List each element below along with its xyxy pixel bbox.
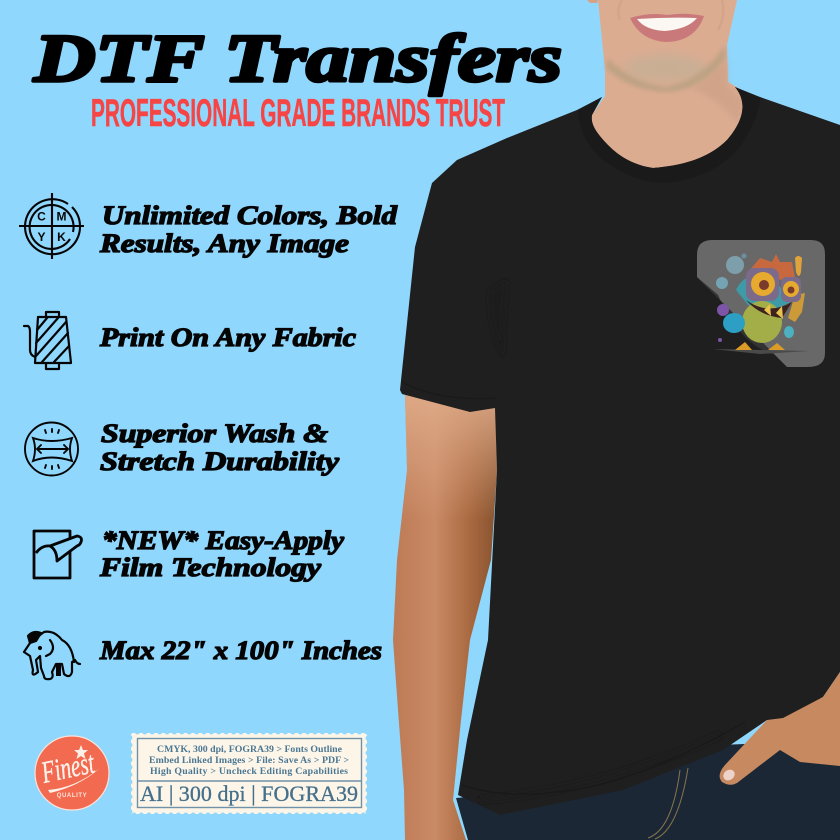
star: [74, 745, 88, 759]
eyes: [751, 272, 775, 296]
icon: thread spool: [24, 312, 71, 369]
monster artwork: [713, 254, 810, 354]
swash: [48, 768, 100, 793]
script word: Finest: [38, 744, 98, 790]
divider: [137, 780, 362, 782]
stamp paper: [131, 733, 367, 814]
text: wash and stretch durability: Stretch Durability: [100, 447, 340, 476]
quality label: QUALITY: [57, 793, 87, 799]
jaw shadow: [606, 45, 726, 92]
inner frame: [138, 738, 362, 808]
teeth: [637, 18, 697, 31]
stamp: file specification: [130, 732, 368, 815]
badge: finest quality: [35, 736, 109, 810]
text: wash and stretch durability: [100, 419, 340, 476]
lips: [630, 14, 704, 42]
icon: CMYK registration target: C: [37, 210, 46, 224]
feet: [735, 342, 785, 350]
icon: stretch durability: [25, 422, 78, 476]
text: print on any fabric: Print On Any Fabric: [99, 323, 357, 352]
teal arm: [723, 313, 745, 333]
jeans stitching: [648, 768, 688, 839]
mouth and teeth: [746, 300, 792, 318]
teal head: [736, 276, 795, 312]
orange hair: [748, 254, 795, 282]
arm: [393, 395, 497, 840]
icon: CMYK registration target: Y: [37, 230, 46, 244]
mouth: [630, 14, 704, 42]
sleeve hem: [402, 382, 496, 399]
icon: elephant: [24, 632, 80, 679]
scalloped edge: [130, 732, 368, 815]
text: unlimited colors: [99, 201, 398, 258]
t-shirt: [400, 87, 840, 815]
text: wash and stretch durability: Superior Wash &: [101, 419, 328, 448]
transparent film: [697, 240, 825, 367]
text: easy-apply film: Film Technology: [99, 553, 322, 582]
text: easy-apply film: [99, 526, 345, 582]
fingernail: [721, 767, 737, 783]
ear: [587, 0, 598, 3]
right arm: [784, 326, 794, 338]
neck shadow: [693, 60, 745, 125]
shirt folds: [480, 735, 720, 800]
shadow streak: [713, 349, 810, 354]
instructions: CMYK, 300 dpi, FOGRA39 > Fonts Outline: [157, 744, 343, 755]
peeled corner: [697, 277, 787, 367]
icon: CMYK registration target: K: [57, 230, 66, 244]
collar band: [578, 87, 760, 183]
icon: CMYK registration target: [19, 193, 84, 259]
upper arm highlight: [402, 395, 497, 520]
chin stubble: [623, 54, 707, 82]
text: unlimited colors: Unlimited Colors, Bold: [102, 201, 398, 230]
hem: [462, 722, 745, 794]
hand in pocket: [720, 672, 840, 785]
icon: CMYK registration target: M: [56, 210, 66, 224]
icon: peeling film: [34, 531, 82, 578]
photo: man wearing black t-shirt: [393, 0, 840, 840]
jeans: [456, 740, 840, 840]
green body: [742, 301, 782, 343]
instructions: High Quality > Uncheck Editing Capabilities: [150, 766, 348, 777]
paint splats: [726, 256, 744, 274]
neck and face: [585, 0, 750, 180]
text: easy-apply film: *NEW* Easy-Apply: [102, 526, 345, 555]
instructions: [149, 744, 349, 777]
glasses: [746, 268, 779, 301]
title: DTF Transfers: [33, 20, 562, 96]
DTF film transfer on the shirt: [697, 240, 825, 367]
instructions: Embed Linked Images > File: Save As > PDF >: [149, 755, 349, 766]
feature list: [19, 193, 398, 679]
text: unlimited colors: Results, Any Image: [99, 229, 349, 258]
sleeve fold: [489, 280, 507, 357]
large spec line: AI | 300 dpi | FOGRA39: [140, 781, 358, 806]
smile creases: [618, 0, 723, 30]
text: max size: Max 22" x 100" Inches: [99, 636, 382, 665]
